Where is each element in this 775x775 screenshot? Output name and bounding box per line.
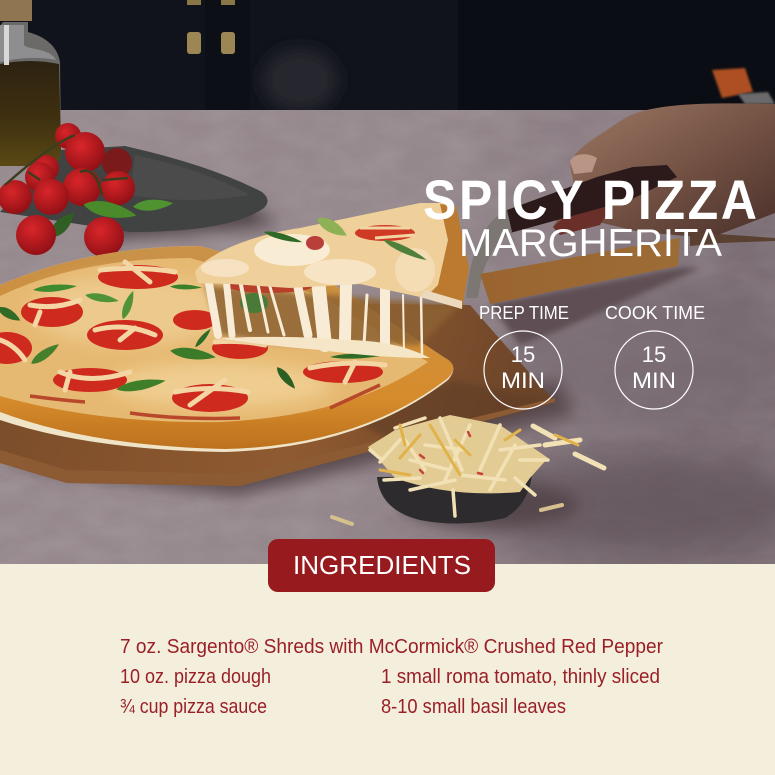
prep time: [479, 303, 569, 409]
cream ingredients panel: [0, 564, 775, 775]
cook time value: 15: [642, 342, 666, 367]
cook time circle: [615, 331, 693, 409]
ingredient: basil: 8-10 small basil leaves: [381, 696, 566, 718]
basil leaves on pizza: [0, 283, 386, 394]
cook time: [605, 303, 705, 409]
bowl of shredded cheese: [332, 415, 604, 527]
shadow beneath slice: [205, 285, 460, 345]
melted cheese streaks on tomatoes: [0, 262, 385, 405]
cheese strings: [208, 278, 422, 355]
dark kitchen backdrop: [0, 0, 775, 112]
serving plate: [0, 146, 280, 240]
olive oil bottle: [0, 0, 61, 166]
cook time unit: MIN: [632, 368, 676, 393]
badge background: [268, 539, 495, 592]
wooden pizza peel: [0, 238, 700, 495]
prep time unit: MIN: [501, 368, 545, 393]
whole pizza: [0, 246, 453, 452]
countertop: [0, 110, 775, 565]
ingredient: sauce: ¾ cup pizza sauce: [120, 696, 267, 718]
prep time label: PREP TIME: [479, 303, 569, 323]
cook time label: COOK TIME: [605, 303, 705, 323]
ingredient: tomato: 1 small roma tomato, thinly sliced: [381, 666, 660, 688]
badge text: INGREDIENTS: [293, 550, 471, 580]
ingredient: dough: 10 oz. pizza dough: [120, 666, 271, 688]
ingredient: shreds: 7 oz. Sargento® Shreds with McCormick® Crushed Red Pepper: [120, 636, 663, 658]
prep time value: 15: [511, 342, 535, 367]
title line: Spicy Pizza: SPICY PIZZA: [423, 169, 757, 232]
title: [423, 169, 757, 265]
tomato slices: [0, 265, 383, 412]
hand and pizza server: [466, 103, 775, 298]
basil on slice: [263, 229, 303, 245]
ingredients heading badge: [268, 539, 495, 592]
cherry tomatoes on the vine: [0, 123, 173, 257]
title line: Margherita: MARGHERITA: [459, 222, 722, 265]
background photo: pizza on a countertop: [0, 0, 775, 565]
ingredients list: [120, 636, 663, 718]
lifted pizza slice with stretching cheese: [195, 203, 469, 358]
prep time circle: [484, 331, 562, 409]
